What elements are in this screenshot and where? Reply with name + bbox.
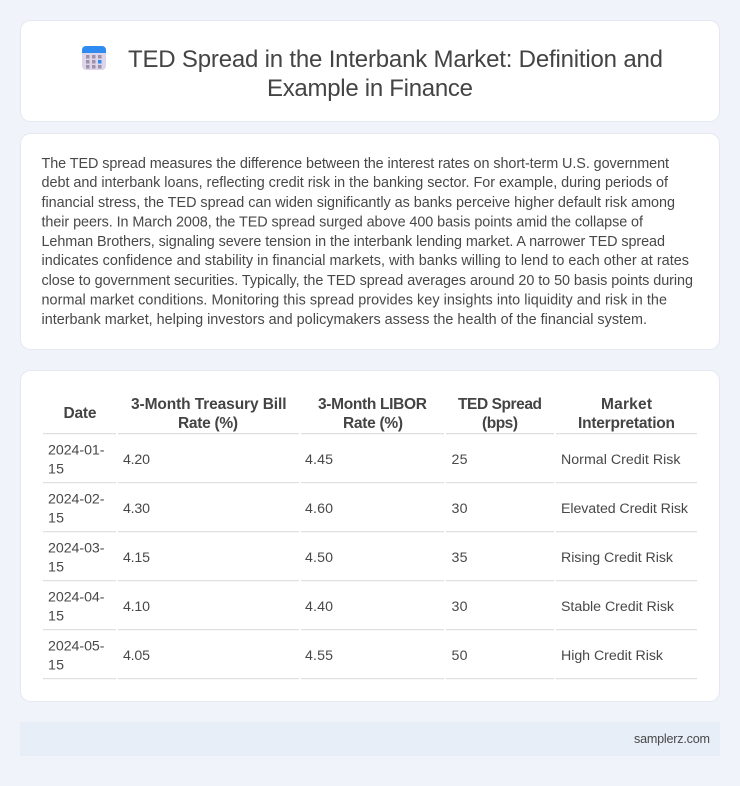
text block: description paragraph: their peers. In March 2008, the TED spread surged above 400 basis points amid the collapse of bbox=[42, 214, 644, 230]
text block: description paragraph: financial stress, the TED spread can widen significantly as banks perceive higher default risk among bbox=[42, 195, 675, 211]
table header row: 3-Month Treasury Bill bbox=[131, 396, 286, 413]
footer source text: samplerz.com bbox=[634, 732, 710, 746]
panel: data table bbox=[20, 370, 720, 702]
panel: title header bbox=[20, 20, 720, 122]
table row: 2024-03-15: 2024-03- bbox=[48, 540, 105, 556]
table row: 2024-04-15: 15 bbox=[48, 608, 64, 624]
table row: 2024-05-15: 15 bbox=[48, 658, 64, 674]
text block: description paragraph: indicates confidence and stability in financial markets, with banks willing to lend to each other at rates bbox=[42, 253, 689, 269]
table row: 2024-02-15: 15 bbox=[48, 510, 64, 526]
text block: description paragraph bbox=[42, 156, 693, 328]
title bbox=[128, 46, 663, 102]
table header row bbox=[64, 396, 675, 432]
table row: 2024-01-15: 15 bbox=[48, 462, 64, 478]
text block: description paragraph: Lehman Brothers, signaling severe tension in the interbank lending market. A narrower TED spread bbox=[42, 234, 665, 250]
table header row: Rate (%) bbox=[178, 415, 238, 432]
text block: description paragraph: normal market conditions. Monitoring this spread provides key insights into liquidity and risk in the bbox=[42, 292, 667, 308]
table row: 2024-05-15 bbox=[48, 638, 664, 674]
text block: description paragraph: interbank market, helping investors and policymakers assess the health of the financial system. bbox=[42, 312, 647, 328]
table row: 2024-05-15: 50 bbox=[452, 648, 468, 664]
table row: 2024-01-15: 4.20 bbox=[123, 452, 150, 468]
table header row: Market bbox=[601, 396, 652, 413]
table row: 2024-05-15: 4.05 bbox=[123, 648, 150, 664]
text block: description paragraph: close to government securities. Typically, the TED spread averages around 20 to 50 basis points during bbox=[42, 273, 693, 289]
table row: 2024-04-15: 30 bbox=[452, 599, 468, 615]
table row: 2024-05-15: 4.55 bbox=[305, 648, 333, 664]
table header row: 3-Month LIBOR bbox=[318, 396, 427, 413]
table row: 2024-01-15: 2024-01- bbox=[48, 442, 105, 458]
table row: 2024-05-15: High Credit Risk bbox=[561, 648, 664, 664]
table row: 2024-01-15: 4.45 bbox=[305, 452, 333, 468]
table row: 2024-04-15: 4.40 bbox=[305, 599, 333, 615]
table row: 2024-02-15 bbox=[48, 492, 689, 526]
table row: 2024-05-15: 2024-05- bbox=[48, 638, 105, 654]
table header row: TED Spread bbox=[458, 396, 542, 413]
table header row: Date bbox=[64, 405, 97, 422]
table header row: Interpretation bbox=[578, 415, 675, 432]
table row: 2024-04-15: Stable Credit Risk bbox=[561, 599, 675, 615]
table row: 2024-02-15: 4.30 bbox=[123, 501, 150, 517]
table row: 2024-02-15: 4.60 bbox=[305, 501, 333, 517]
title: Example in Finance bbox=[267, 75, 473, 102]
icon: calendar bbox=[82, 46, 106, 70]
table row: 2024-04-15: 2024-04- bbox=[48, 590, 105, 606]
table row: 2024-04-15: 4.10 bbox=[123, 599, 150, 615]
table row: 2024-03-15 bbox=[48, 540, 674, 576]
table row: 2024-03-15: 4.50 bbox=[305, 550, 333, 566]
table header row: (bps) bbox=[482, 415, 518, 432]
table row: 2024-03-15: 4.15 bbox=[123, 550, 150, 566]
title: TED Spread in the Interbank Market: Definition and bbox=[128, 46, 663, 73]
table row: 2024-03-15: 15 bbox=[48, 560, 64, 576]
table row: 2024-03-15: 35 bbox=[452, 550, 468, 566]
table row: 2024-03-15: Rising Credit Risk bbox=[561, 550, 674, 566]
table row: 2024-01-15: Normal Credit Risk bbox=[561, 452, 681, 468]
table row: 2024-02-15: 30 bbox=[452, 501, 468, 517]
text block: description paragraph: The TED spread measures the difference between the interest rates on short-term U.S. government bbox=[42, 156, 669, 172]
panel: description bbox=[20, 134, 720, 350]
text block: description paragraph: debt and interbank loans, reflecting credit risk in the banking sector. For example, during periods of bbox=[42, 175, 669, 191]
table row: 2024-01-15: 25 bbox=[452, 452, 468, 468]
table header row: Rate (%) bbox=[343, 415, 403, 432]
table row: 2024-04-15 bbox=[48, 590, 675, 624]
table row: 2024-02-15: 2024-02- bbox=[48, 492, 105, 508]
footer bar bbox=[20, 722, 720, 756]
table row: 2024-02-15: Elevated Credit Risk bbox=[561, 501, 689, 517]
table row: 2024-01-15 bbox=[48, 442, 681, 478]
